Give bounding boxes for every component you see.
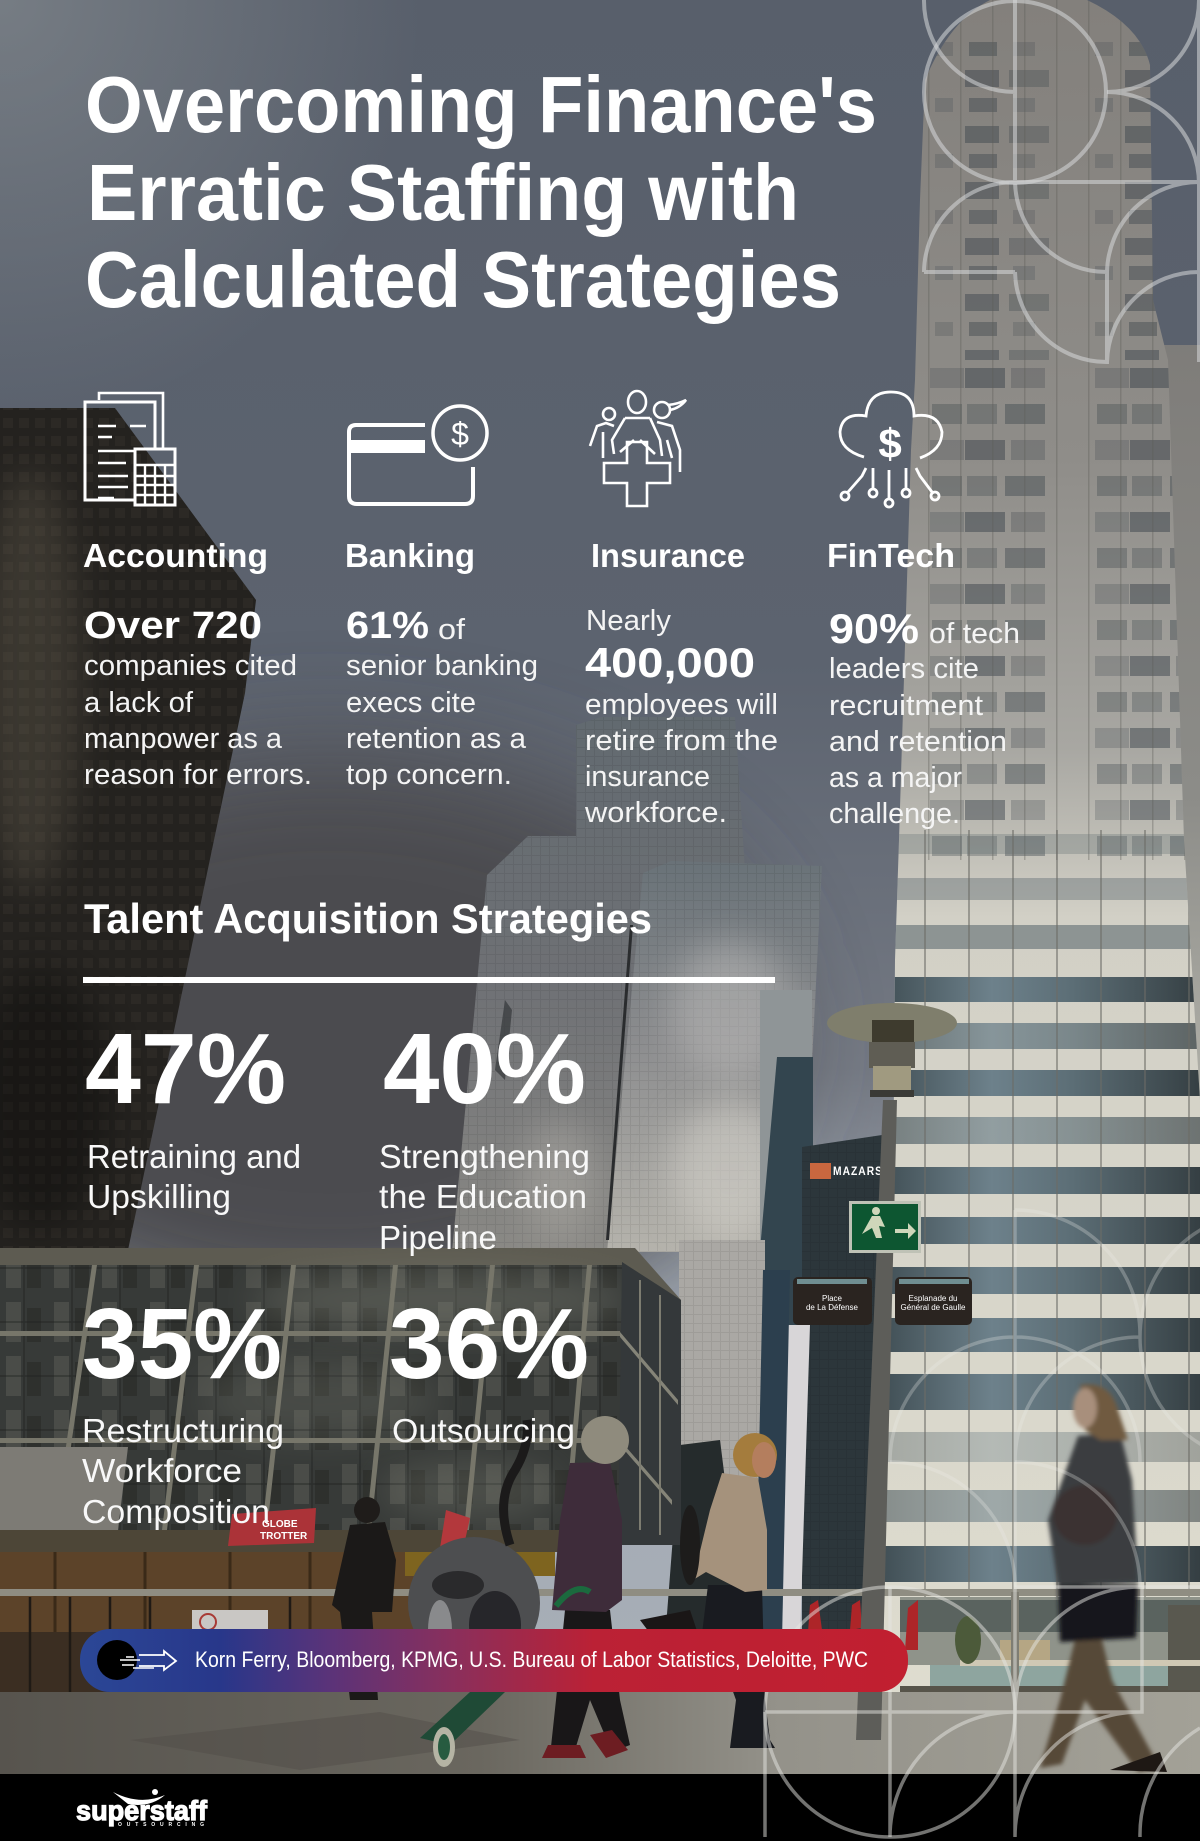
left dark building xyxy=(0,408,256,1250)
stat text: 400,000: 400,000 xyxy=(585,639,755,686)
sign: Mazars: MAZARS xyxy=(833,1164,883,1178)
source list: Korn Ferry, Bloomberg, KPMG, U.S. Bureau of Labor Statistics, Deloitte, PWC xyxy=(195,1647,868,1672)
stat text: 61% xyxy=(346,605,538,791)
decorative arcs: bottom right xyxy=(765,1587,1200,1837)
stat: 35% restructuring workforce composition: Composition xyxy=(82,1493,270,1530)
heading: Banking: Banking xyxy=(345,537,475,574)
stat text: 61%: top concern. xyxy=(346,759,512,791)
stat: 35% restructuring workforce composition: 35% xyxy=(82,1288,282,1400)
stat text: 400,000: Nearly xyxy=(586,605,671,637)
woman in tan jacket xyxy=(640,1433,777,1748)
stat text: 61%: 61% xyxy=(346,605,429,647)
stat text: 90% xyxy=(829,605,1020,830)
sculpture xyxy=(408,1420,540,1669)
stat: 47% retraining and upskilling: Retraining and xyxy=(87,1138,301,1175)
stat text: 90%: and retention xyxy=(829,726,1007,758)
icon: card and coin xyxy=(349,406,487,504)
street signs: Esplanade du xyxy=(909,1294,957,1303)
sign: Mazars xyxy=(810,1163,883,1179)
mid dark glass buildings xyxy=(665,990,883,1640)
stat text: 90%: as a major xyxy=(829,762,962,794)
stat: 35% restructuring workforce composition: Workforce xyxy=(82,1452,242,1489)
street lamp and signs xyxy=(793,1003,972,1740)
icon: speeding arrow xyxy=(97,1640,176,1680)
sign: Globe Trotter xyxy=(228,1508,316,1546)
logo: superstaff outsourcing: OUTSOURCING xyxy=(118,1822,204,1828)
stat: 40% strengthening the education pipeline xyxy=(379,1013,590,1256)
street signs: Général de Gaulle xyxy=(901,1303,966,1312)
heading: Insurance: Insurance xyxy=(591,537,745,574)
stat text: 90%: challenge. xyxy=(829,798,960,830)
stat text: 400,000: retire from the xyxy=(585,725,778,757)
stat: 47% retraining and upskilling: 47% xyxy=(85,1013,286,1125)
stat: 40% strengthening the education pipeline: the Education xyxy=(379,1178,587,1215)
man in black xyxy=(332,1497,396,1700)
panel: banking xyxy=(345,406,538,791)
decorative arcs: top right xyxy=(924,0,1199,362)
sources pill xyxy=(80,1629,908,1692)
heading: talent acquisition strategies: Talent Acquisition Strategies xyxy=(84,895,652,942)
panel: fintech xyxy=(827,392,1020,830)
stat text: 400,000: workforce. xyxy=(584,797,727,829)
main cylindrical tower xyxy=(880,0,1200,1700)
centre glass towers xyxy=(452,717,822,1252)
stat text: over 720 xyxy=(84,605,312,791)
sign: Globe Trotter: GLOBE xyxy=(262,1519,298,1530)
stat: 47% retraining and upskilling: Upskilling xyxy=(87,1178,231,1215)
stat text: over 720: manpower as a xyxy=(84,723,283,755)
street level: fence, railing and ground xyxy=(0,1589,1200,1774)
stat: 36% outsourcing xyxy=(389,1288,589,1449)
far right building xyxy=(1150,345,1200,1200)
title: Overcoming Finance's xyxy=(85,60,877,149)
stat text: 61%: senior banking xyxy=(346,650,538,682)
stat: 40% strengthening the education pipeline: Pipeline xyxy=(379,1219,497,1256)
stat text: 90%: 90% xyxy=(829,605,919,652)
street signs xyxy=(793,1277,972,1325)
icon: cloud with dollar and circuit: $ xyxy=(878,420,902,467)
stat: 40% strengthening the education pipeline: Strengthening xyxy=(379,1138,590,1175)
stat text: over 720: Over 720 xyxy=(84,605,262,647)
sign: Globe Trotter: TROTTER xyxy=(260,1531,308,1542)
stat text: 61%: of xyxy=(438,614,466,646)
stat text: 61%: execs cite xyxy=(346,687,476,719)
stat text: 400,000 xyxy=(584,605,778,829)
heading: FinTech: FinTech xyxy=(827,537,955,574)
footer band xyxy=(0,1774,1200,1841)
stat text: 90%: recruitment xyxy=(829,690,983,722)
green exit sign xyxy=(849,1201,921,1253)
stat text: 61%: retention as a xyxy=(346,723,527,755)
icon: documents and calculator xyxy=(85,393,175,505)
icon: card and coin: $ xyxy=(451,416,469,452)
pedestrians xyxy=(332,1384,1167,1772)
stat: 36% outsourcing: Outsourcing xyxy=(392,1412,575,1449)
icon: family and medical cross xyxy=(590,391,686,506)
title xyxy=(85,60,877,324)
woman in purple coat xyxy=(420,1416,630,1767)
blurred walking woman xyxy=(1040,1384,1160,1772)
title: Calculated Strategies xyxy=(85,235,841,324)
panel: accounting xyxy=(83,393,312,791)
panel: insurance xyxy=(584,391,778,829)
stat text: over 720: companies cited xyxy=(84,650,297,682)
stat: 47% retraining and upskilling xyxy=(85,1013,301,1215)
icon: cloud with dollar and circuit xyxy=(840,392,942,507)
heading: Accounting: Accounting xyxy=(83,537,268,574)
street signs: de La Défense xyxy=(806,1303,859,1312)
decorative arcs: upper tower area xyxy=(890,1210,1200,1587)
stat text: 400,000: insurance xyxy=(585,761,710,793)
stat: 35% restructuring workforce composition xyxy=(82,1288,284,1530)
stat text: 90%: of tech xyxy=(929,618,1020,650)
stat text: 400,000: employees will xyxy=(585,689,778,721)
street signs: Place xyxy=(822,1294,843,1303)
stat text: 90%: leaders cite xyxy=(829,653,979,685)
stat: 35% restructuring workforce composition: Restructuring xyxy=(82,1412,284,1449)
stat text: over 720: reason for errors. xyxy=(84,759,312,791)
stat: 36% outsourcing: 36% xyxy=(389,1288,589,1400)
stat text: over 720: a lack of xyxy=(84,687,194,719)
low glass building xyxy=(0,1248,681,1632)
stat: 40% strengthening the education pipeline: 40% xyxy=(383,1013,586,1125)
logo: superstaff outsourcing: superstaff xyxy=(76,1795,208,1826)
title: Erratic Staffing with xyxy=(87,148,799,237)
